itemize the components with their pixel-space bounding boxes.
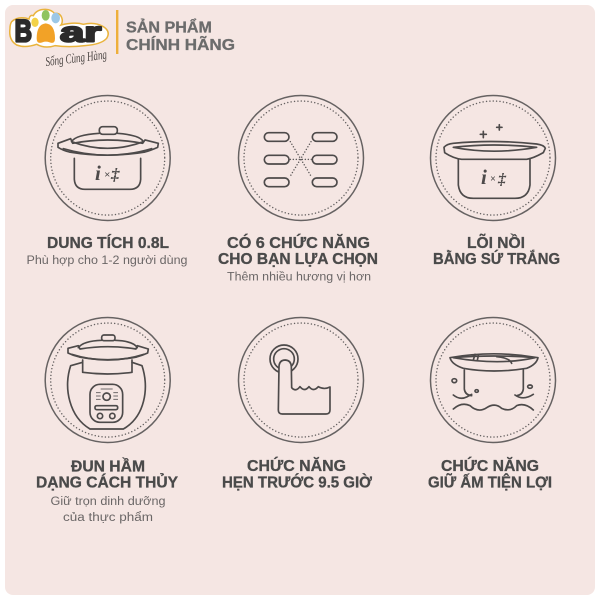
header divider bbox=[116, 10, 118, 54]
logo letter B: B bbox=[15, 13, 32, 49]
logo paw bbox=[31, 10, 60, 43]
panel: double boil: DẠNG CÁCH THỦY bbox=[36, 474, 179, 492]
panel: double boil: của thực phẩm bbox=[63, 512, 153, 524]
logo signature: Sống Cùng Hàng bbox=[45, 47, 108, 69]
icon: clay pot with lid: × bbox=[104, 169, 110, 181]
text: double boil detail: Giữ trọn dinh dưỡng bbox=[50, 496, 166, 508]
text: six functions detail: Thêm nhiều hương vị hơn bbox=[227, 272, 371, 284]
panel: ceramic pot: BẰNG SỨ TRẮNG bbox=[433, 250, 560, 268]
panel: double boil bbox=[36, 318, 179, 524]
header text: SẢN PHẨM bbox=[126, 18, 212, 36]
panel: six functions bbox=[218, 96, 378, 284]
heading: ceramic pot: LÕI NỒI bbox=[467, 234, 525, 252]
icon: ceramic inner pot: i bbox=[481, 165, 487, 189]
heading: double boil: ĐUN HẦM bbox=[71, 458, 145, 476]
header text bbox=[126, 18, 235, 54]
panel: capacity bbox=[26, 96, 188, 267]
panel: ceramic pot bbox=[430, 96, 560, 268]
icon: pot in water bbox=[430, 318, 556, 442]
icon: finger pressing button bbox=[238, 318, 364, 442]
heading: timer: CHỨC NĂNG bbox=[247, 457, 346, 475]
panel: keep warm: GIỮ ẤM TIỆN LỢI bbox=[428, 474, 552, 492]
panel: timer bbox=[222, 318, 373, 492]
icon: slow cooker bbox=[45, 318, 170, 442]
panel: six functions: CHO BẠN LỰA CHỌN bbox=[218, 251, 378, 268]
icon: clay pot with lid: i bbox=[95, 161, 101, 185]
logo letters ar: ar bbox=[60, 17, 101, 48]
heading: capacity: DUNG TÍCH 0.8L bbox=[47, 235, 169, 252]
icon: clay pot with lid bbox=[45, 96, 170, 220]
header text: CHÍNH HÃNG bbox=[126, 34, 235, 54]
icon: ceramic inner pot bbox=[430, 96, 556, 220]
panel: timer: HẸN TRƯỚC 9.5 GIỜ bbox=[222, 474, 373, 492]
brand logo bbox=[10, 9, 108, 69]
heading: six functions: CÓ 6 CHỨC NĂNG bbox=[227, 234, 370, 252]
panel: keep warm bbox=[428, 318, 556, 492]
icon: ceramic inner pot: ‡ bbox=[497, 171, 507, 188]
heading: keep warm: CHỨC NĂNG bbox=[441, 457, 539, 475]
icon: clay pot with lid: ‡ bbox=[110, 165, 120, 184]
icon: six function pills bbox=[238, 96, 364, 220]
text: capacity detail: Phù hợp cho 1-2 người dùng bbox=[26, 255, 188, 267]
icon: ceramic inner pot: × bbox=[490, 174, 496, 185]
